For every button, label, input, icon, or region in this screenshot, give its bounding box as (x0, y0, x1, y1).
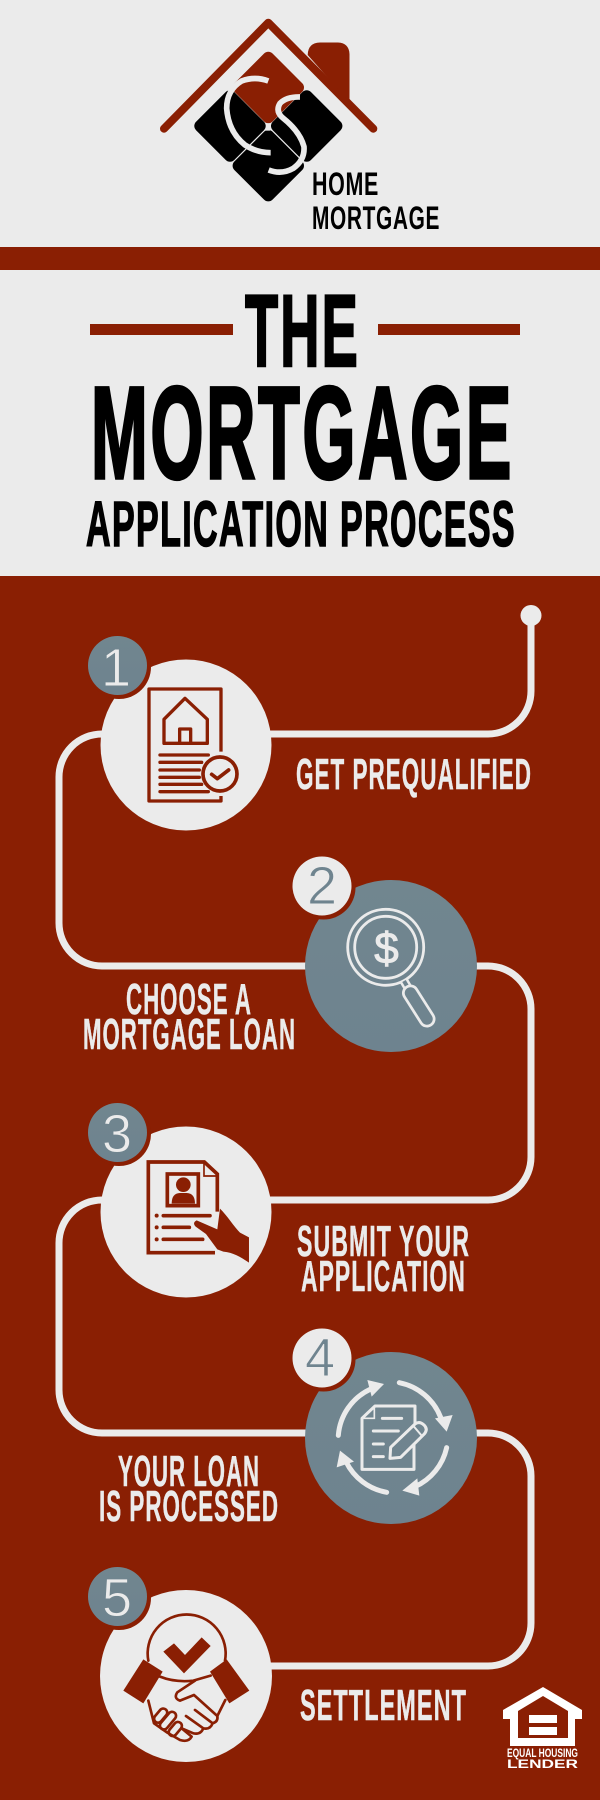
badge 5 (87, 1566, 151, 1630)
title: left rule (90, 324, 233, 335)
badge 3 (87, 1102, 151, 1166)
badge 2: 2 (307, 856, 337, 916)
logo: home mortgage wordmark: MORTGAGE (312, 200, 440, 236)
panel: logo header (0, 0, 600, 247)
label: choose a mortgage loan (83, 975, 296, 1059)
step 2 (83, 856, 477, 1059)
step 4 (99, 1328, 477, 1531)
step 5 (87, 1566, 467, 1762)
icon: equal housing lender (503, 1687, 582, 1771)
title: THE: THE (245, 274, 360, 388)
badge 4 (292, 1328, 356, 1392)
badge 1: 1 (101, 638, 131, 698)
icon: magnifier with dollar: $ (374, 924, 399, 973)
divider band (0, 247, 600, 270)
badge 2 (292, 856, 356, 920)
process path line (59, 605, 542, 1666)
badge 4: 4 (305, 1328, 335, 1388)
icon: magnifier with dollar (348, 909, 427, 1019)
logo: chimney (308, 42, 350, 102)
step 1 (87, 635, 532, 830)
icon: document with house and check (149, 689, 237, 801)
badge 5: 5 (102, 1568, 132, 1628)
label: your loan is processed: YOUR LOAN (118, 1447, 260, 1496)
step 3 (87, 1102, 470, 1301)
logo: roof (164, 23, 373, 129)
label: choose a mortgage loan: MORTGAGE LOAN (83, 1010, 296, 1059)
icon: equal housing lender: LENDER (507, 1759, 579, 1771)
icon: application in hand (148, 1162, 249, 1263)
badge 3: 3 (102, 1104, 132, 1164)
label: your loan is processed: IS PROCESSED (99, 1482, 279, 1531)
label: your loan is processed (99, 1447, 279, 1531)
label: submit your application (297, 1217, 470, 1301)
icon: document with cycle arrows (337, 1380, 453, 1496)
logo: home mortgage wordmark: HOME (312, 166, 379, 202)
logo: CS monogram (227, 78, 304, 172)
logo: home mortgage wordmark (312, 166, 440, 236)
panel: title (0, 270, 600, 576)
logo: diamonds (192, 49, 345, 204)
badge 1 (87, 635, 151, 699)
title: right rule (378, 324, 520, 335)
label: choose a mortgage loan: CHOOSE A (126, 975, 252, 1024)
icon: handshake with check (123, 1614, 249, 1741)
